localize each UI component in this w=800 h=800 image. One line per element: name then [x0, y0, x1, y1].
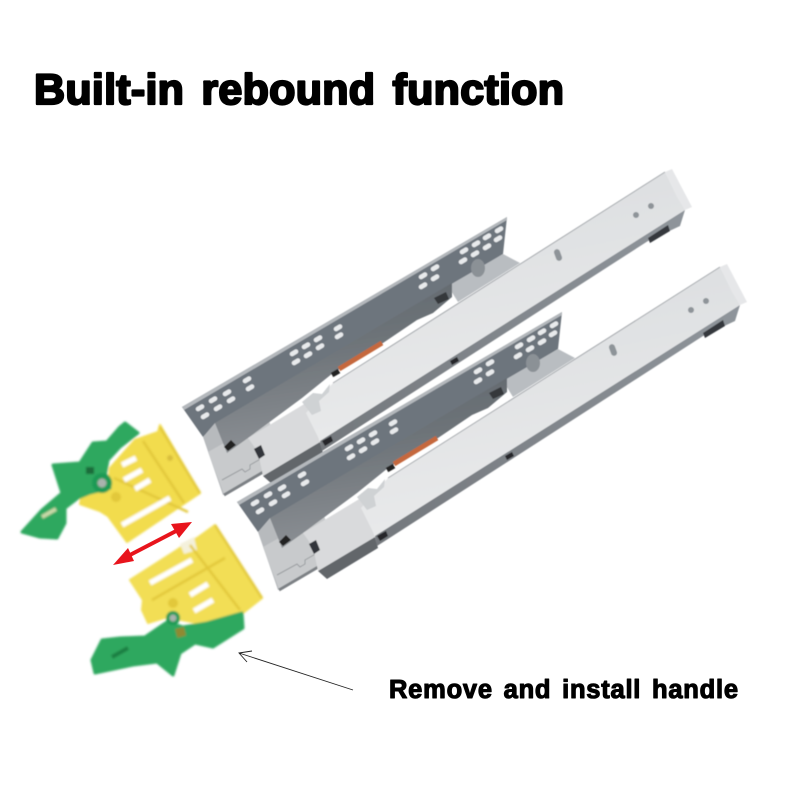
- latch tab: [357, 479, 385, 510]
- middle slide: [248, 403, 320, 476]
- title: Built-in rebound function: [34, 66, 564, 114]
- latch tab: [302, 384, 330, 415]
- clip ridges: [114, 427, 200, 512]
- mount boss: [526, 354, 540, 372]
- end cap: [720, 264, 747, 305]
- clip slots: [150, 560, 213, 611]
- red double-headed arrow: [113, 522, 192, 565]
- handle slot and window: [112, 648, 128, 657]
- green handle: [22, 423, 138, 538]
- pivot bolt: [92, 473, 112, 493]
- handle clip: lower, closed: [92, 525, 262, 675]
- handle clip: upper, open: [22, 423, 200, 542]
- main slide face: [306, 172, 685, 441]
- tray base: [203, 423, 270, 495]
- clip slots: [122, 458, 170, 525]
- tray base: [258, 518, 325, 590]
- main slide face: [361, 267, 740, 536]
- yellow clip body: [80, 425, 200, 542]
- main slide side: [375, 305, 740, 546]
- drawer slide: upper rail: [182, 169, 692, 495]
- rivets and slot: [608, 298, 709, 357]
- mounting flange with holes: [182, 217, 507, 437]
- inner channel: [270, 378, 507, 548]
- orange damper: [339, 343, 382, 369]
- handle slot and window: [42, 509, 56, 517]
- white insert: [180, 537, 197, 554]
- caption: Remove and install handle: [389, 676, 738, 704]
- end cap: [665, 169, 692, 210]
- main slide side: [320, 210, 685, 451]
- green handle: [92, 613, 243, 675]
- inner channel: [215, 283, 452, 453]
- rivets and slot: [553, 203, 654, 262]
- mount boss: [471, 259, 485, 277]
- thin pointer arrow: [239, 651, 353, 690]
- yellow clip body: [130, 525, 262, 623]
- drawer slide: lower rail: [237, 264, 747, 590]
- mounting flange with holes: [237, 312, 562, 532]
- pivot bolt: [166, 611, 180, 625]
- orange damper: [394, 438, 437, 464]
- middle slide: [303, 498, 375, 571]
